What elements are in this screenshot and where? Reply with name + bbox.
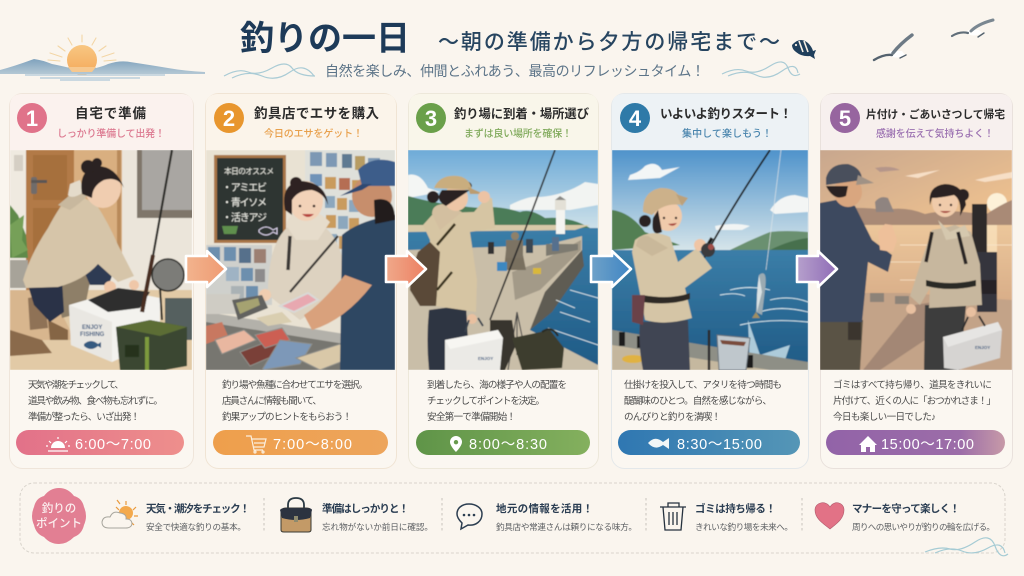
- woman: [639, 320, 690, 370]
- green tackle box: [116, 320, 187, 370]
- step 2 description: 店員さんに情報も聞いて、: [222, 395, 322, 407]
- illustration: saying goodbye at sunset: ENJOY: [975, 345, 990, 350]
- panel: step 4: [612, 94, 808, 468]
- tip: local info: 地元の情報を活用！: [496, 502, 593, 515]
- tip: preparation: 準備はしっかりと！: [322, 502, 409, 515]
- tip: take trash home: きれいな釣り場を未来へ。: [695, 521, 793, 532]
- number badge 3: 3: [425, 106, 437, 131]
- counter: [206, 322, 341, 370]
- time pill 5: 15:00～17:00: [881, 437, 974, 453]
- step 4 heading: いよいよ釣りスタート！: [660, 106, 792, 121]
- trays: [206, 322, 228, 344]
- head: [86, 178, 122, 208]
- illustration: choosing a spot on the pier: ENJOY: [478, 356, 493, 361]
- step 5 description: 今日も楽しい一日でした♪: [833, 411, 936, 423]
- number badge 1: [17, 103, 47, 133]
- step 3 description: 到着したら、海の様子や人の配置を: [427, 379, 567, 391]
- tip: weather: 天気・潮汐をチェック！: [146, 502, 250, 515]
- icon: striped fish: [792, 40, 816, 59]
- boots: [28, 295, 48, 330]
- belt and pouch: [642, 293, 690, 303]
- badge: fishing points: [32, 488, 86, 544]
- time pill 1: 6:00～7:00: [75, 437, 151, 453]
- illustration: choosing a spot on the pier: [408, 150, 598, 370]
- step 1 catchphrase: しっかり準備して出発！: [57, 127, 165, 140]
- hands and reel: [694, 239, 706, 251]
- illustration: woman packing gear at home: [10, 150, 193, 370]
- clerk: [340, 215, 395, 370]
- step 3 heading: 釣り場に到着・場所選び: [454, 106, 590, 121]
- panel: step 5: [820, 94, 1012, 468]
- title: 釣りの一日: [240, 20, 410, 58]
- time pill 2: 7:00～8:00: [273, 437, 352, 453]
- step 4 description: [624, 379, 782, 423]
- icon: trash can: [660, 503, 686, 530]
- illustration: buying bait at the shop: ・活きアジ: [222, 212, 267, 224]
- panel: step 1: [10, 94, 194, 468]
- arrow: step 1 to 2: [186, 251, 226, 287]
- pier: [408, 236, 598, 370]
- illustration: woman packing gear at home: ENJOY: [82, 325, 102, 331]
- time pill 5: [826, 430, 1005, 455]
- icon: speech bubble: [457, 504, 482, 529]
- icon: fish: [648, 438, 669, 449]
- step 2 description: 釣り場や魚種に合わせてエサを選択。: [222, 379, 368, 391]
- arrow: step 4 to 5: [797, 251, 837, 287]
- icon: map pin: [450, 436, 462, 452]
- jacket: [23, 192, 134, 288]
- step 3 catchphrase: まずは良い場所を確保！: [464, 127, 572, 140]
- icon: sunrise over mountains logo: [0, 35, 205, 80]
- panel: fishing tips: [20, 483, 1005, 553]
- number badge 3: [416, 103, 446, 133]
- time pill 4: 8:30～15:00: [677, 437, 762, 453]
- badge: fishing points: ポイント: [36, 517, 82, 530]
- step 4 description: 仕掛けを投入して、アタリを待つ時間も: [624, 379, 782, 391]
- number badge 5: [830, 103, 860, 133]
- time pill 1: [16, 430, 184, 455]
- number badge 2: 2: [223, 106, 235, 131]
- tip: weather: 安全で快適な釣りの基本。: [146, 521, 246, 532]
- bucket: [717, 335, 750, 370]
- tagline: 自然を楽しみ、仲間とふれあう、最高のリフレッシュタイム！: [325, 63, 705, 79]
- tripod: [507, 312, 523, 370]
- step 3 description: 安全第一で準備開始！: [427, 411, 516, 423]
- dark bag: [512, 330, 564, 370]
- step 4 catchphrase: 集中して楽しもう！: [682, 127, 772, 140]
- shelves right: [306, 150, 394, 250]
- panel: step 2: [206, 94, 396, 468]
- woman: [268, 228, 342, 320]
- shelves left: [206, 245, 272, 305]
- step 1 description: [28, 379, 163, 423]
- step 4 description: のんびりと釣りを満喫！: [624, 411, 721, 423]
- tackle: [490, 320, 516, 370]
- time pill 3: 8:00～8:30: [469, 437, 547, 453]
- trousers: [60, 274, 90, 318]
- rod case: [972, 204, 987, 264]
- tip: preparation: 忘れ物がないか前日に確認。: [322, 521, 433, 532]
- icon: seagull 2: [952, 20, 993, 37]
- number badge 4: 4: [629, 106, 642, 131]
- illustration: woman packing gear at home: FISHING: [80, 332, 105, 338]
- step 3 description: [427, 379, 567, 423]
- cooler: [445, 330, 503, 370]
- icon: bag: [280, 498, 312, 532]
- step 2 catchphrase: 今日のエサをゲット！: [264, 127, 363, 140]
- icon: heart: [815, 503, 844, 529]
- time pill 3: [416, 430, 590, 455]
- tip: local info: [457, 502, 637, 532]
- icon: shopping cart: [246, 436, 266, 453]
- tip: preparation: [280, 498, 433, 532]
- woman: [428, 305, 468, 370]
- tip: manners: 周りへの思いやりが釣りの輪を広げる。: [852, 521, 995, 532]
- step 1 description: 天気や潮をチェックして、: [28, 379, 124, 391]
- cooler: [943, 322, 1002, 370]
- icon: house: [859, 436, 877, 452]
- fishing rod: [490, 150, 555, 320]
- step 5 description: ゴミはすべて持ち帰り、道具をきれいに: [833, 379, 992, 391]
- tip: take trash home: ゴミは持ち帰る！: [695, 502, 776, 515]
- step 1 description: 道具や飲み物、食べ物も忘れずに。: [28, 395, 163, 407]
- water highlights: [548, 290, 598, 345]
- tip: weather: [102, 500, 250, 532]
- ground: [820, 293, 1012, 370]
- number badge 5: 5: [839, 106, 851, 131]
- step 5 catchphrase: 感謝を伝えて気持ちよく！: [876, 127, 994, 140]
- tip: take trash home: [660, 502, 793, 532]
- icon: sunrise: [46, 437, 70, 451]
- tip: manners: [815, 502, 995, 532]
- icon: seagull 1: [874, 35, 912, 60]
- bait tray held: [280, 293, 318, 312]
- yellow bait tray: [622, 355, 644, 363]
- step 2 description: [222, 379, 368, 423]
- step 5 description: [833, 379, 996, 423]
- step 3 description: チェックしてポイントを決定。: [427, 395, 545, 407]
- wave decoration bottom right: [925, 538, 1008, 556]
- step 1 heading: 自宅で準備: [75, 105, 146, 121]
- step 2 heading: 釣具店でエサを購入: [254, 105, 380, 121]
- illustration: saying goodbye at sunset: [820, 150, 1012, 370]
- step 4 description: 醍醐味のひとつ。自然を感じながら、: [624, 395, 772, 407]
- number badge 2: [214, 103, 244, 133]
- step 5 description: 片付けて、近くの人に「おつかれさま！」: [833, 395, 996, 407]
- illustration: buying bait at the shop: [206, 150, 395, 370]
- illustration: buying bait at the shop: 本日のオススメ: [224, 166, 274, 176]
- fishing line and fish: [766, 150, 781, 270]
- anglers: [488, 232, 559, 274]
- number badge 1: 1: [26, 106, 38, 131]
- hands: [104, 281, 116, 293]
- illustration: buying bait at the shop: ・アミエビ: [222, 182, 267, 194]
- tip: local info: 釣具店や常連さんは頼りになる味方。: [496, 521, 637, 532]
- step 2 description: 釣果アップのヒントをもらおう！: [222, 411, 352, 423]
- rod holder: [708, 330, 710, 370]
- arrow: step 2 to 3: [386, 251, 426, 287]
- fishing rod: [143, 150, 172, 312]
- time pill 2: [213, 430, 388, 455]
- tip: manners: マナーを守って楽しく！: [852, 502, 960, 515]
- arrow: step 3 to 4: [591, 251, 631, 287]
- splash: [747, 320, 790, 359]
- wave decoration left: [224, 64, 315, 78]
- lighthouse: [556, 210, 565, 234]
- subtitle heading: ～朝の準備から夕方の帰宅まで～: [438, 31, 780, 54]
- chalkboard: [214, 155, 286, 243]
- icon: sun and cloud: [102, 500, 138, 528]
- cooler: [69, 290, 160, 362]
- step 1 description: 準備が整ったら、いざ出発！: [28, 411, 140, 423]
- backpack: [410, 242, 440, 306]
- illustration: casting and catching a fish: [612, 150, 808, 370]
- rod: [704, 150, 770, 258]
- number badge 4: [620, 103, 650, 133]
- step 5 heading: 片付け・ごあいさつして帰宅: [866, 107, 1005, 121]
- woman: [924, 305, 966, 370]
- landing net: [152, 259, 184, 291]
- quay: [612, 330, 770, 370]
- illustration: buying bait at the shop: ・青イソメ: [222, 196, 267, 209]
- man: [820, 320, 863, 370]
- panel: step 3: [408, 94, 598, 468]
- badge: fishing points: 釣りの: [42, 501, 76, 515]
- time pill 4: [618, 430, 800, 455]
- wave decoration right: [722, 62, 800, 77]
